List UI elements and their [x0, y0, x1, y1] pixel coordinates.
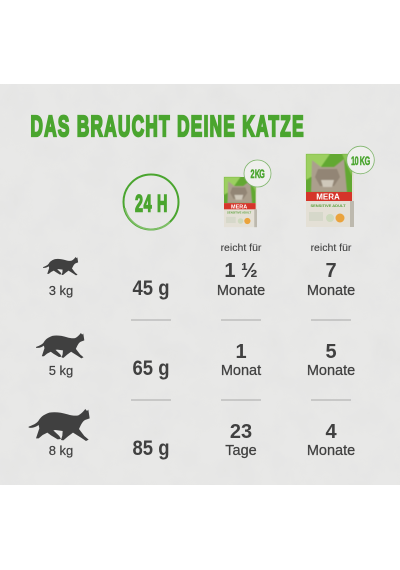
duration: 1 Monat: 1 — [235, 341, 247, 363]
title: DAS BRAUCHT DEINE KATZE — [30, 111, 303, 142]
duration: 23 Tage — [225, 421, 257, 459]
duration: 7 Monate: 7 — [325, 260, 337, 282]
duration: 7 Monate — [307, 260, 355, 299]
badge: 10 KG — [347, 146, 374, 174]
badge: 2 KG: 2 KG — [250, 168, 265, 182]
icon: small cat — [43, 257, 78, 275]
icon: large cat — [29, 409, 90, 441]
label: reicht für 2 kg: reicht für — [221, 242, 262, 254]
duration: 1 Monat: Monat — [221, 363, 261, 379]
duration: 1 1/2 Monate: Monate — [217, 283, 265, 299]
duration: 1 1/2 Monate: 1 ½ — [224, 260, 258, 282]
badge: 2 KG — [244, 160, 271, 187]
product: 10 kg bag: MERA — [316, 192, 340, 202]
duration: 1 1/2 Monate — [217, 260, 265, 299]
duration: 23 Tage: Tage — [225, 443, 257, 459]
duration: 23 Tage: 23 — [230, 421, 252, 443]
duration: 4 Monate — [307, 421, 355, 459]
duration: 4 Monate: Monate — [307, 443, 355, 459]
product: 2 kg bag: MERA — [231, 204, 247, 210]
product: 2 kg bag — [224, 177, 257, 227]
duration: 5 Monate: 5 — [325, 341, 337, 363]
amount: 65 g: 65 g — [132, 357, 170, 380]
badge: 10 KG: 10 KG — [351, 155, 370, 169]
label: 3 kg: 3 kg — [49, 283, 73, 298]
label: 8 kg: 8 kg — [49, 443, 73, 458]
icon: 24 hour brush ring: 24 H — [135, 191, 167, 218]
panel: paper background — [0, 84, 400, 485]
icon: medium cat — [36, 333, 84, 358]
duration: 4 Monate: 4 — [325, 421, 337, 443]
label: reicht für 10 kg: reicht für — [311, 242, 352, 254]
duration: 5 Monate: Monate — [307, 363, 355, 379]
amount: 45 g: 45 g — [132, 277, 170, 300]
amount: 85 g: 85 g — [132, 437, 170, 460]
product: 10 kg bag — [306, 154, 354, 227]
product: 2 kg bag: SENSITIVE ADULT — [227, 210, 252, 214]
duration: 1 Monat — [221, 341, 261, 379]
label: 5 kg: 5 kg — [49, 363, 73, 378]
duration: 5 Monate — [307, 341, 355, 379]
duration: 7 Monate: Monate — [307, 283, 355, 299]
product: 10 kg bag: SENSITIVE ADULT — [310, 203, 346, 208]
icon: 24 hour brush ring — [124, 174, 178, 230]
